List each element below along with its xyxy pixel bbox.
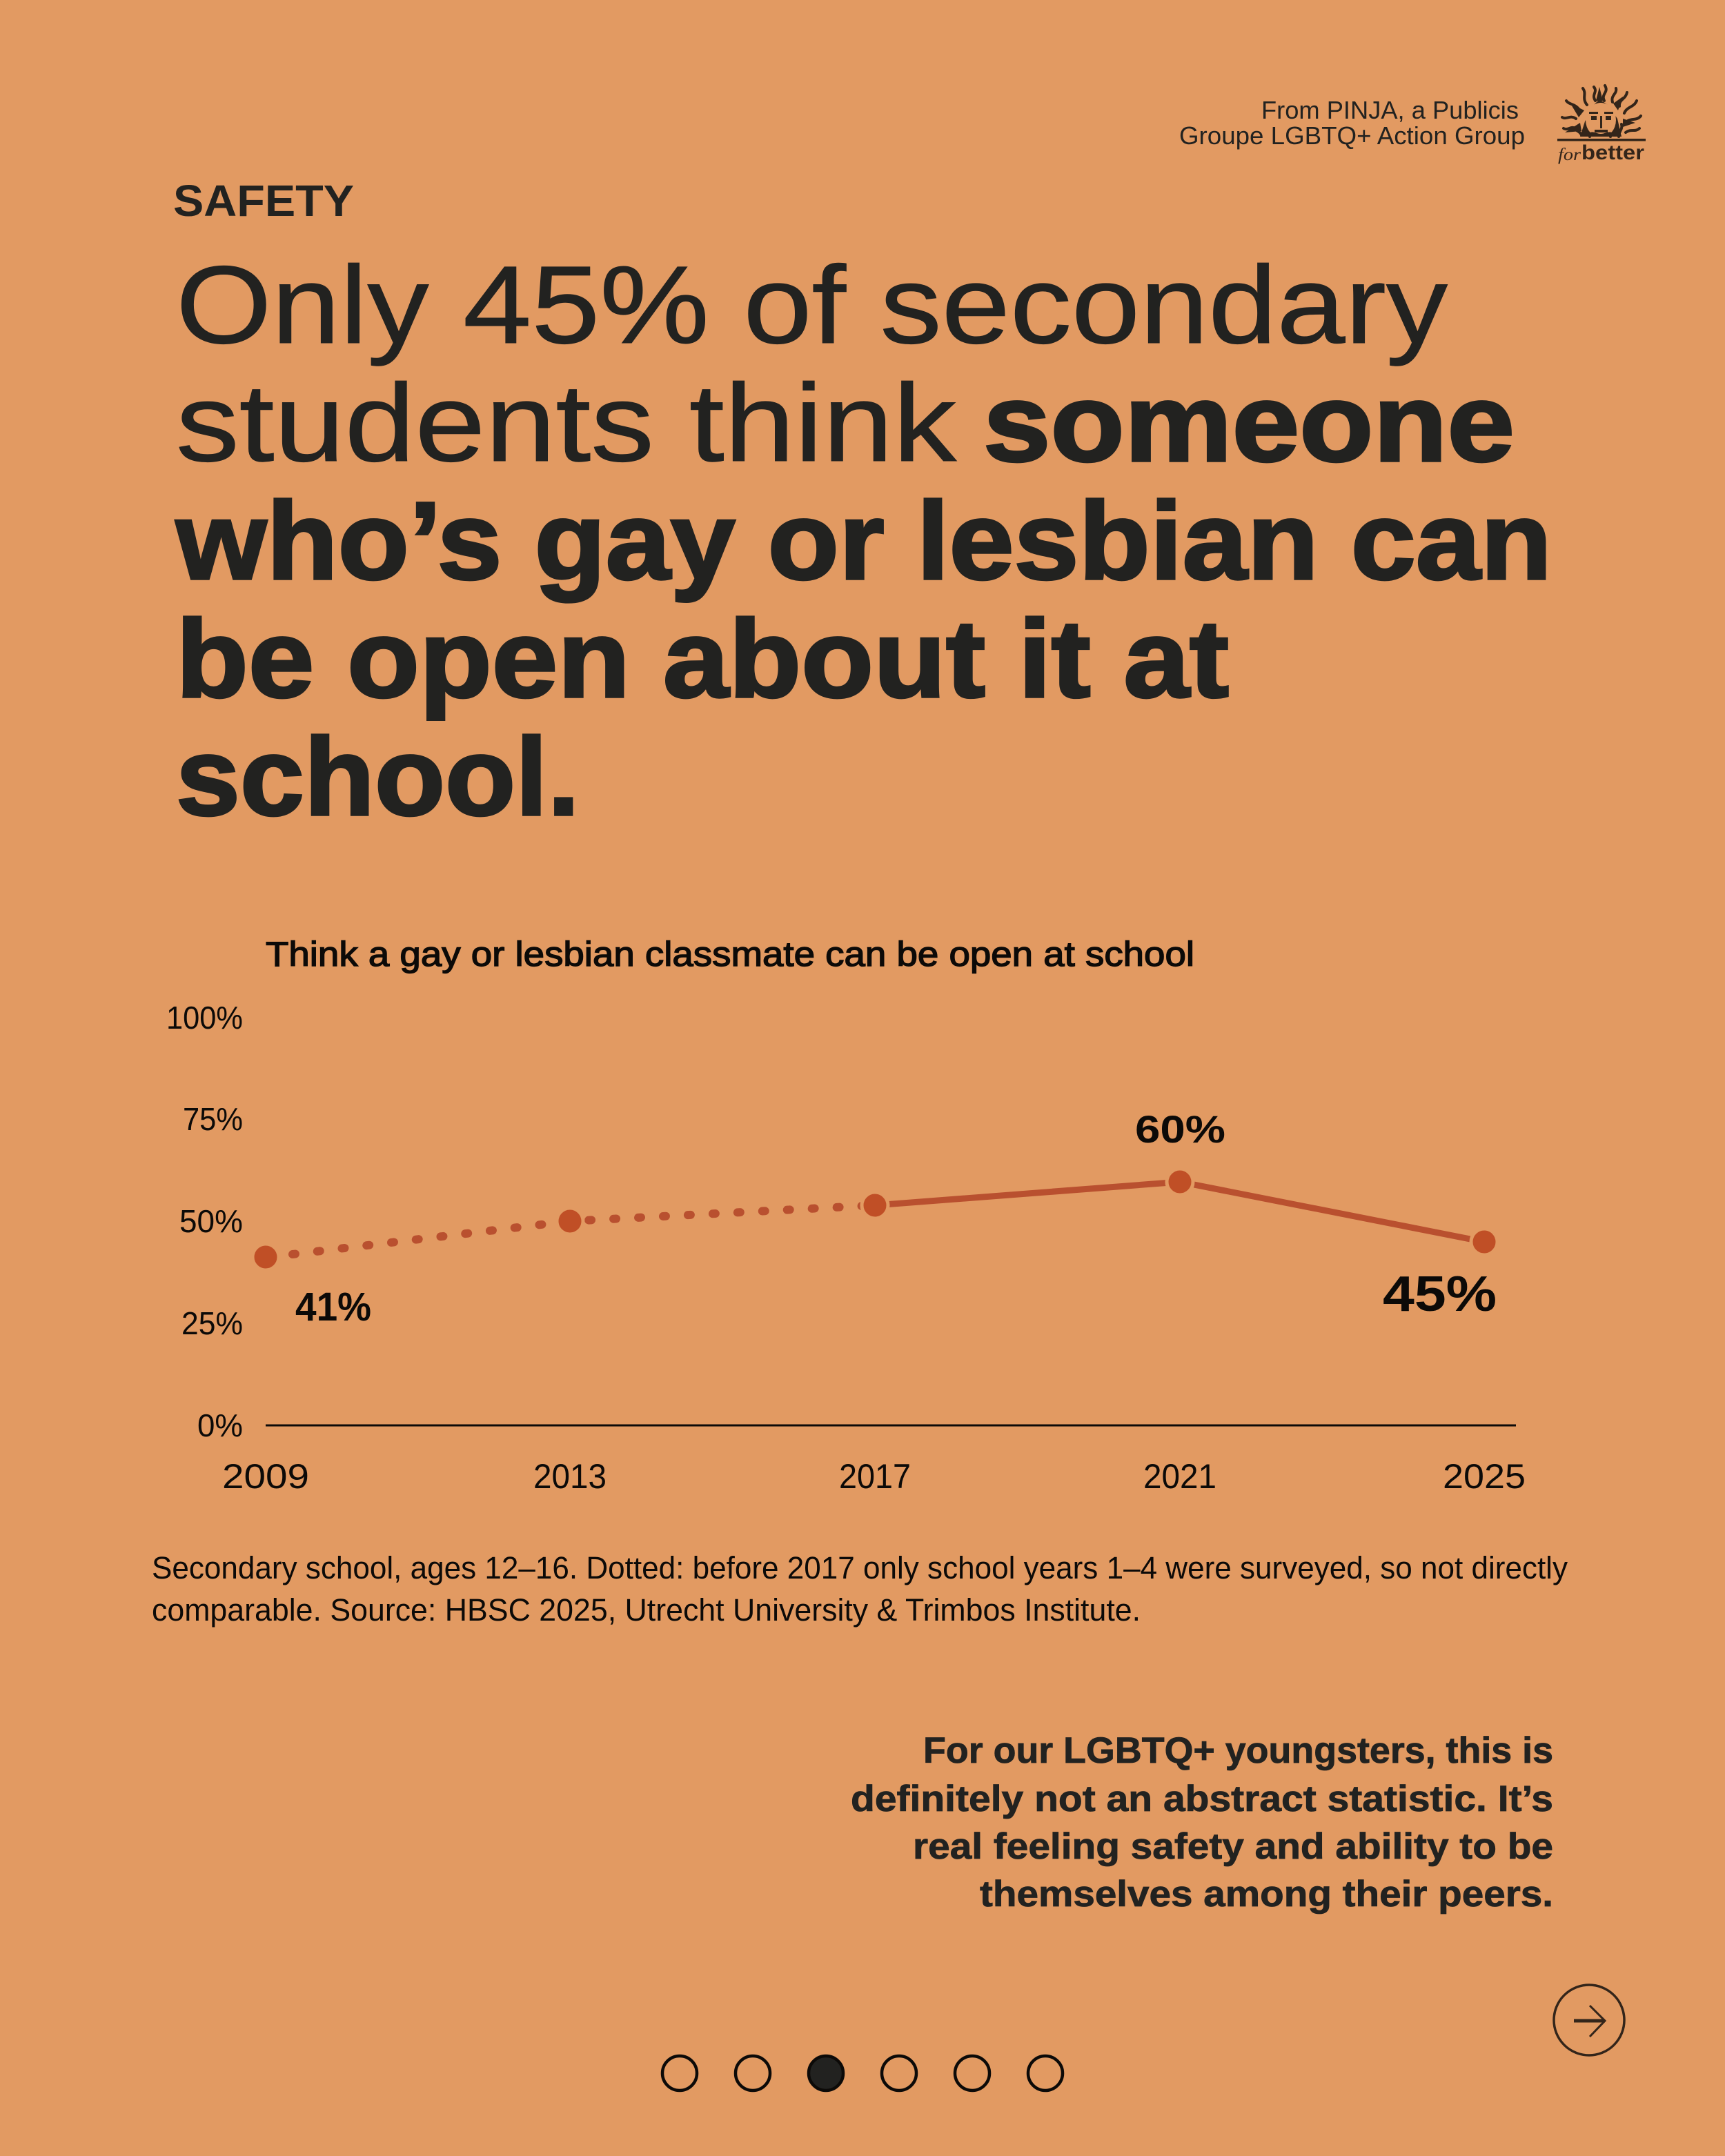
icon: next arrow (1554, 1985, 1624, 2055)
chart title: Think a gay or lesbian classmate can be open at school (266, 935, 1194, 973)
icon: Publicis lion logo: for (1558, 146, 1581, 164)
x axis labels: 2009 (222, 1457, 309, 1496)
closing statement (851, 1730, 1553, 1915)
headline (175, 243, 1552, 838)
headline: someone (983, 361, 1515, 484)
dotted line segment 2009 to 2017 (293, 1205, 875, 1254)
value labels: 45% (1383, 1267, 1497, 1322)
headline: Only 45% of secondary (176, 243, 1448, 366)
pagination dots (662, 2056, 1063, 2090)
value labels (295, 1107, 1497, 1329)
headline: who’s gay or lesbian can (175, 479, 1552, 602)
y axis labels: 25% (181, 1305, 243, 1341)
section label: SAFETY (173, 176, 354, 226)
closing statement: For our LGBTQ+ youngsters, this is (923, 1730, 1553, 1771)
attribution text: Groupe LGBTQ+ Action Group (1179, 121, 1525, 150)
attribution text (1179, 96, 1525, 150)
data points (253, 1169, 1497, 1270)
headline: school. (176, 715, 580, 838)
closing statement: real feeling safety and ability to be (913, 1826, 1553, 1867)
source note: Secondary school, ages 12–16. Dotted: before 2017 only school years 1–4 were surveyed, so not directly (152, 1550, 1568, 1585)
source note: comparable. Source: HBSC 2025, Utrecht University & Trimbos Institute. (152, 1592, 1141, 1628)
closing statement: definitely not an abstract statistic. It’s (851, 1779, 1553, 1819)
y axis labels: 75% (183, 1101, 243, 1137)
y axis labels: 50% (179, 1203, 243, 1239)
y axis labels: 100% (166, 1000, 243, 1036)
headline: students think (176, 361, 957, 484)
y axis labels: 0% (197, 1407, 243, 1443)
y axis labels (166, 1000, 243, 1443)
icon: Publicis lion logo: better (1581, 141, 1644, 164)
x axis labels (222, 1457, 1526, 1496)
value labels: 41% (295, 1285, 371, 1329)
attribution text: From PINJA, a Publicis (1261, 96, 1519, 124)
icon: Publicis lion logo (1557, 86, 1646, 164)
x axis labels: 2017 (839, 1457, 911, 1496)
source note (152, 1550, 1568, 1628)
x axis baseline (266, 1424, 1516, 1427)
closing statement: themselves among their peers. (980, 1874, 1553, 1915)
value labels: 60% (1135, 1107, 1225, 1151)
solid line segment 2017 to 2025 (875, 1182, 1484, 1242)
x axis labels: 2013 (533, 1457, 607, 1496)
x axis labels: 2021 (1143, 1457, 1216, 1496)
chart: line chart of openness at school (166, 935, 1526, 1496)
x axis labels: 2025 (1443, 1457, 1526, 1496)
headline: be open about it at (176, 597, 1229, 720)
